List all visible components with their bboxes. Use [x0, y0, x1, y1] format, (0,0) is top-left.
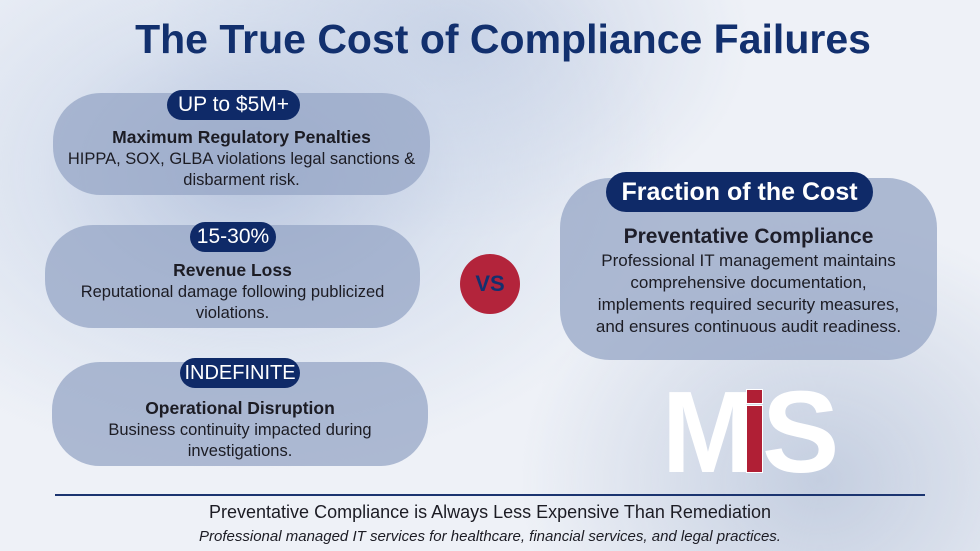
heading: Preventative Compliance	[624, 225, 873, 248]
badge: INDEFINITE	[180, 358, 300, 388]
badge: 15-30%	[190, 222, 276, 252]
logo: MiS: M	[662, 367, 754, 497]
text block: comprehensive documentation,	[630, 273, 867, 292]
logo: MiS: S	[762, 367, 839, 497]
badge: fraction of the cost	[606, 172, 873, 212]
divider	[55, 494, 925, 496]
badge: 15-30%: 15-30%	[197, 225, 269, 248]
text block: Professional IT management maintains	[601, 251, 896, 270]
text block	[108, 421, 372, 460]
text block: and ensures continuous audit readiness.	[596, 317, 901, 336]
text block	[68, 150, 415, 189]
text block	[81, 283, 384, 322]
panel: operational disruption	[52, 362, 428, 466]
text block	[596, 251, 901, 336]
text block: violations.	[196, 304, 269, 322]
footer subtext: Professional managed IT services for healthcare, financial services, and legal practices.	[199, 528, 781, 545]
panel: revenue loss	[45, 225, 420, 328]
panel: preventative compliance	[560, 178, 937, 360]
text block: Business continuity impacted during	[108, 421, 372, 439]
VS circle: VS	[475, 271, 505, 296]
text block: HIPPA, SOX, GLBA violations legal sanctions &	[68, 150, 415, 168]
text block: investigations.	[188, 442, 292, 460]
heading: Operational Disruption	[145, 398, 335, 418]
title: The True Cost of Compliance Failures	[135, 16, 871, 62]
panel: regulatory penalties	[53, 93, 430, 195]
badge: fraction of the cost: Fraction of the Cost	[621, 178, 858, 206]
badge: UP to $5M+: UP to $5M+	[178, 93, 289, 116]
footer tagline: Preventative Compliance is Always Less Expensive Than Remediation	[209, 502, 771, 522]
heading: Maximum Regulatory Penalties	[112, 127, 371, 147]
text block: Reputational damage following publicized	[81, 283, 384, 301]
text block: disbarment risk.	[183, 171, 300, 189]
heading: Revenue Loss	[173, 260, 292, 280]
text block: implements required security measures,	[598, 295, 899, 314]
badge: INDEFINITE: INDEFINITE	[184, 362, 296, 384]
VS circle	[460, 254, 520, 314]
badge: UP to $5M+	[167, 90, 300, 120]
logo: MiS	[662, 367, 839, 497]
